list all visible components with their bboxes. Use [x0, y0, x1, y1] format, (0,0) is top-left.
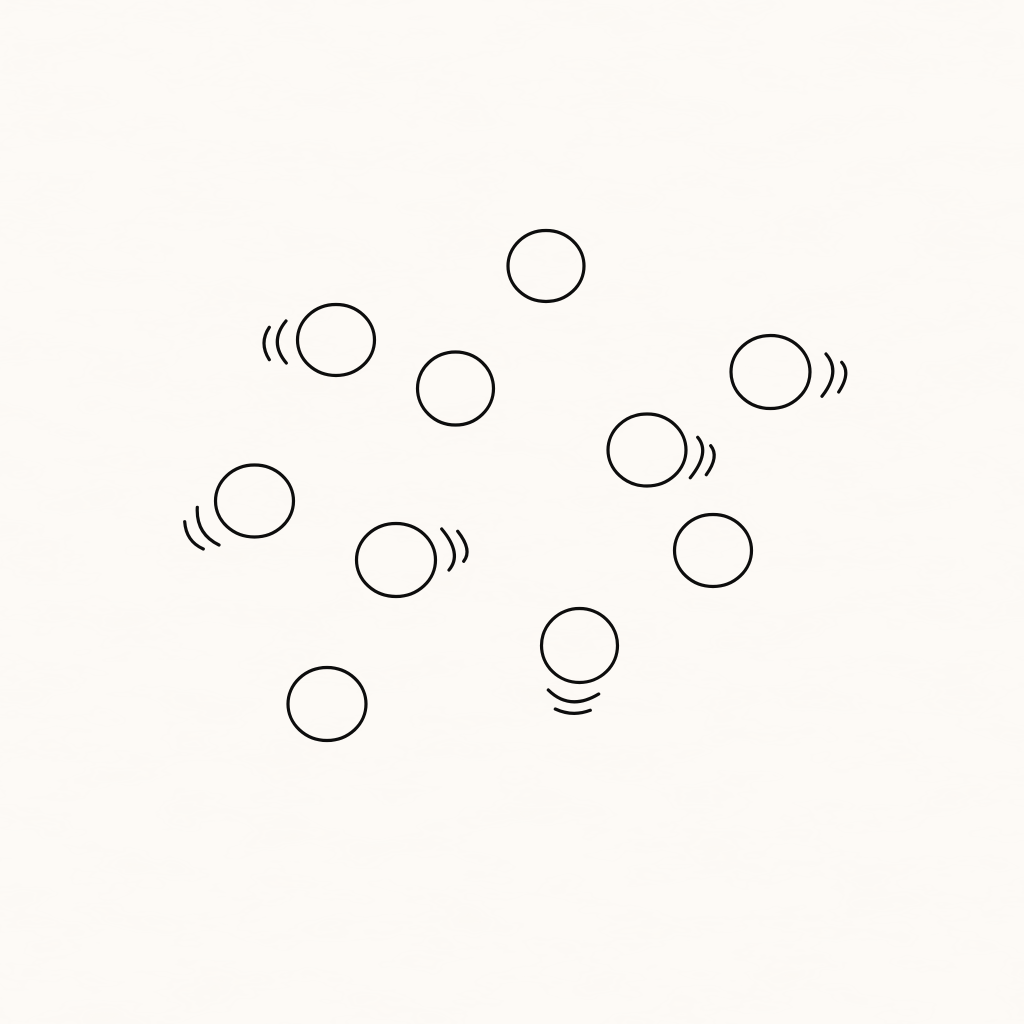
circle: upper right moving right	[731, 336, 846, 408]
circle: right still	[674, 514, 752, 586]
circle: center upper still	[418, 352, 494, 425]
circle: upper left moving left	[264, 304, 374, 376]
circle: center right moving right	[608, 414, 714, 486]
circle: left moving lower left	[185, 465, 294, 549]
circle: center lower moving right	[356, 524, 467, 596]
circle: top still	[508, 230, 584, 302]
circle: lower left still	[288, 668, 366, 740]
circle: bottom moving down	[542, 608, 618, 713]
